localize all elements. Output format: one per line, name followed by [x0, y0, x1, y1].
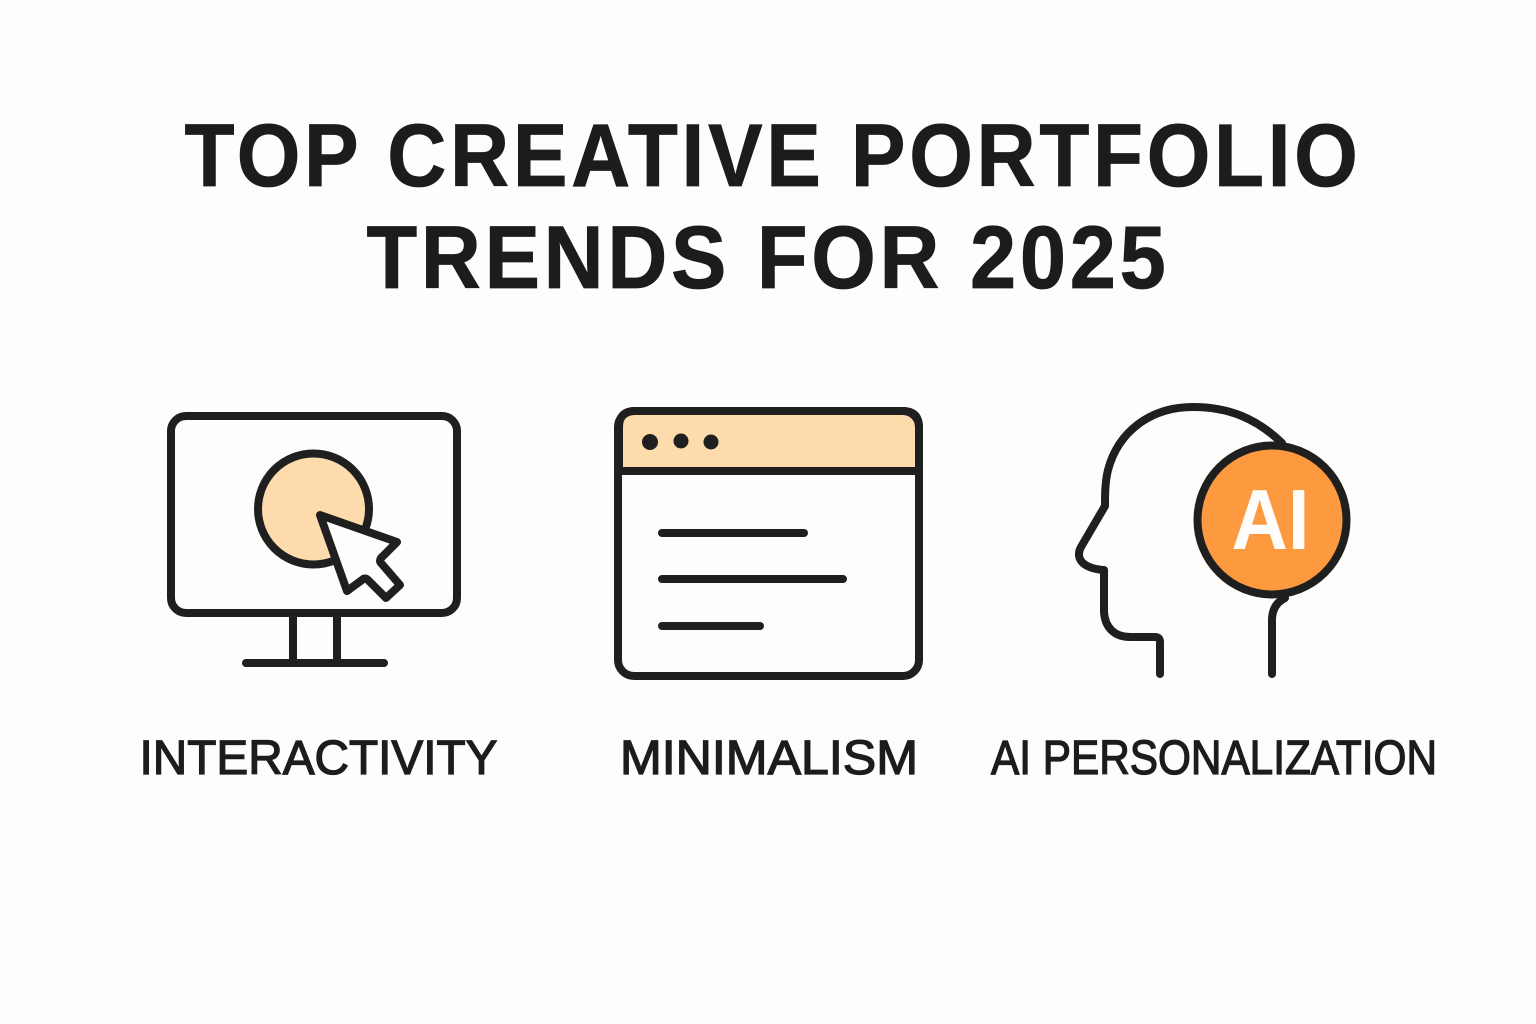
icon: browser window: [618, 411, 919, 676]
title: TOP CREATIVE PORTFOLIO: [184, 105, 1362, 205]
title: [184, 105, 1362, 307]
ai badge text: AI: [1232, 473, 1310, 568]
icon: head with AI circle: [1079, 407, 1346, 674]
label: interactivity: INTERACTIVITY: [140, 732, 498, 785]
icon: monitor with cursor: [171, 416, 457, 663]
label: ai personalization: AI PERSONALIZATION: [991, 732, 1437, 785]
label: minimalism: MINIMALISM: [620, 732, 918, 785]
panel: minimalism: [618, 411, 919, 785]
panel: ai personalization: [991, 407, 1437, 785]
title: TRENDS FOR 2025: [366, 207, 1170, 307]
panel: interactivity: [140, 416, 498, 785]
